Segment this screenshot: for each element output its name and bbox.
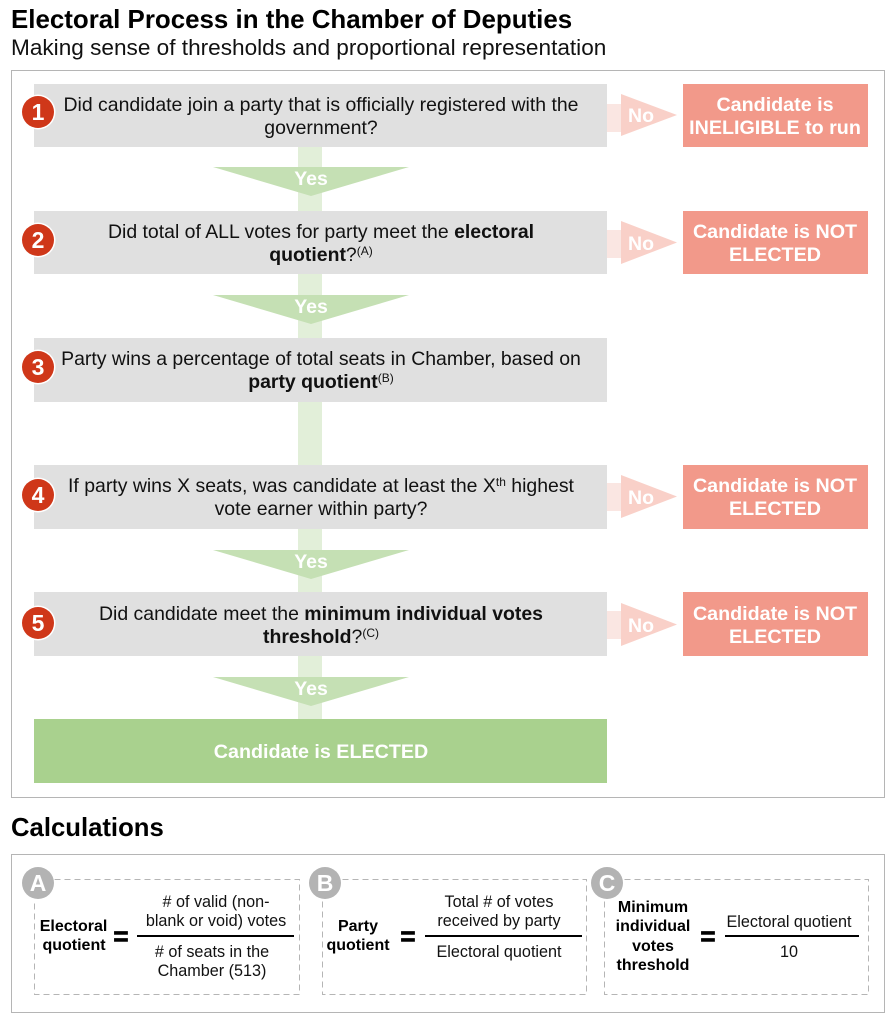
step 2 box: quotient? bbox=[269, 244, 357, 266]
formula A bbox=[21, 866, 300, 994]
step 1 no arrow: No bbox=[628, 105, 654, 127]
step 5 box: (C) bbox=[362, 626, 379, 640]
formula A: quotient bbox=[42, 937, 106, 954]
formula C bbox=[590, 866, 868, 994]
formula B: quotient bbox=[326, 937, 390, 954]
subtitle: Making sense of thresholds and proportional representation bbox=[11, 35, 606, 60]
step 2 box: (A) bbox=[357, 244, 373, 258]
outcome: not elected 3: Candidate is NOT bbox=[693, 603, 857, 625]
step 5 badge: 5 bbox=[32, 610, 45, 636]
formula C: Electoral quotient bbox=[726, 913, 852, 931]
formula B: B bbox=[317, 870, 333, 896]
step 5 no arrow: No bbox=[628, 615, 654, 637]
step 4 yes arrow: Yes bbox=[294, 551, 328, 573]
vertical connector bbox=[298, 147, 322, 719]
formula A: A bbox=[30, 870, 46, 896]
outcome: not elected 3 bbox=[683, 592, 868, 656]
step 2 no arrow bbox=[607, 221, 677, 264]
formula B: received by party bbox=[437, 912, 562, 930]
formula B: Total # of votes bbox=[445, 893, 553, 911]
step 3 box: Party wins a percentage of total seats in Chamber, based on bbox=[61, 348, 581, 370]
step 2 yes arrow bbox=[213, 295, 409, 324]
step 5 box: threshold? bbox=[263, 626, 362, 648]
step 4 no arrow bbox=[607, 475, 677, 518]
panel: calculations bbox=[12, 854, 884, 1012]
step 5 no arrow bbox=[607, 603, 677, 646]
outcome: not elected 3: ELECTED bbox=[729, 626, 821, 648]
step 5 yes arrow: Yes bbox=[294, 678, 328, 700]
step 2 box bbox=[34, 211, 607, 274]
step 4 badge: 4 bbox=[32, 482, 45, 508]
formula C: C bbox=[599, 870, 615, 896]
formula A: blank or void) votes bbox=[146, 912, 286, 930]
outcome: not elected 2: Candidate is NOT bbox=[693, 475, 857, 497]
step 4 box: th bbox=[496, 475, 506, 489]
formula C: 10 bbox=[780, 943, 798, 961]
step 2 yes arrow: Yes bbox=[294, 296, 328, 318]
step 4 box bbox=[34, 465, 607, 529]
step 4 no arrow: No bbox=[628, 487, 654, 509]
formula C: Minimum bbox=[618, 899, 688, 916]
step 1 yes arrow: Yes bbox=[294, 168, 328, 190]
formula A: # of valid (non- bbox=[162, 893, 270, 911]
step 5 yes arrow bbox=[213, 677, 409, 706]
formula C: votes bbox=[632, 938, 674, 955]
step 4 box: vote earner within party? bbox=[215, 498, 428, 520]
step 4 badge bbox=[20, 478, 56, 512]
step 3 badge: 3 bbox=[32, 354, 44, 380]
outcome: not elected 1 bbox=[683, 211, 868, 274]
step 1 no arrow bbox=[607, 94, 677, 136]
panel: flowchart bbox=[12, 70, 884, 798]
step 1 box bbox=[34, 84, 607, 147]
step 4 yes arrow bbox=[213, 550, 409, 579]
step 1 box: government? bbox=[264, 117, 378, 139]
formula B bbox=[308, 866, 586, 994]
step 3 box bbox=[34, 338, 607, 402]
formula A: = bbox=[113, 921, 129, 951]
formula A: Chamber (513) bbox=[158, 962, 266, 980]
title: Electoral Process in the Chamber of Deputies bbox=[11, 6, 572, 34]
step 1 badge bbox=[20, 94, 56, 130]
step 1 badge: 1 bbox=[32, 99, 45, 125]
step 4 box: highest bbox=[506, 475, 575, 497]
step 2 badge: 2 bbox=[32, 227, 44, 253]
step 3 badge bbox=[20, 350, 56, 384]
step 2 badge bbox=[20, 222, 56, 258]
outcome: elected: Candidate is ELECTED bbox=[214, 741, 428, 763]
step 2 box: Did total of ALL votes for party meet the electoral bbox=[108, 221, 534, 243]
formula B: Party bbox=[338, 918, 378, 935]
outcome: ineligible: INELIGIBLE to run bbox=[689, 117, 861, 139]
outcome: elected bbox=[34, 719, 607, 783]
outcome: not elected 1: Candidate is NOT bbox=[693, 221, 857, 243]
formula C: = bbox=[700, 921, 716, 951]
step 5 box: Did candidate meet the minimum individual votes bbox=[99, 603, 543, 625]
step 3 box: party quotient bbox=[248, 371, 378, 393]
step 4 box: If party wins X seats, was candidate at least the X bbox=[68, 475, 496, 497]
calculations heading: Calculations bbox=[11, 814, 164, 842]
step 2 no arrow: No bbox=[628, 233, 654, 255]
step 1 yes arrow bbox=[213, 167, 409, 196]
step 5 badge bbox=[20, 606, 56, 640]
step 3 box: (B) bbox=[378, 371, 394, 385]
outcome: ineligible: Candidate is bbox=[716, 94, 834, 116]
formula A: # of seats in the bbox=[155, 943, 269, 961]
outcome: not elected 1: ELECTED bbox=[729, 244, 821, 266]
formula B: = bbox=[400, 921, 416, 951]
outcome: ineligible bbox=[683, 84, 868, 147]
step 5 box bbox=[34, 592, 607, 656]
formula A: Electoral bbox=[40, 918, 107, 935]
formula B: Electoral quotient bbox=[436, 943, 562, 961]
step 1 box: Did candidate join a party that is officially registered with the bbox=[63, 94, 579, 116]
outcome: not elected 2: ELECTED bbox=[729, 498, 821, 520]
formula C: threshold bbox=[617, 957, 689, 974]
outcome: not elected 2 bbox=[683, 465, 868, 529]
formula C: individual bbox=[616, 918, 690, 935]
